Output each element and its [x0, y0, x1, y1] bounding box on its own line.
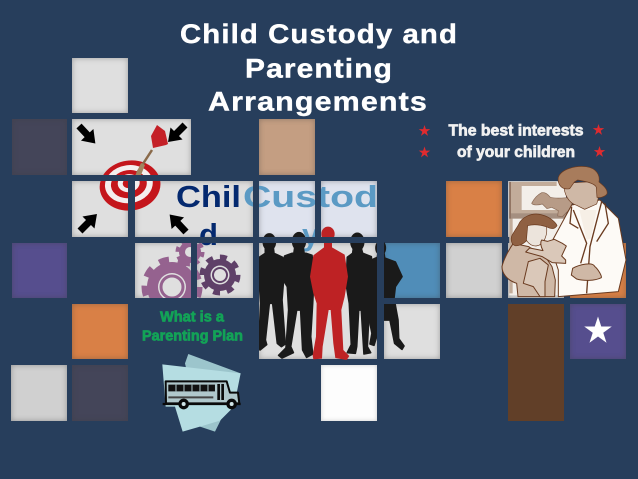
label: What is a Parenting Plan [142, 310, 243, 344]
broken heading: Child Custody: y [302, 217, 320, 252]
silhouette: person 5 [368, 241, 404, 349]
icon: gears [142, 243, 240, 298]
silhouette: red person [310, 227, 349, 360]
paper sheets [162, 354, 241, 432]
shelf background [509, 182, 567, 295]
icon: red stars [419, 124, 605, 157]
icon: bullseye [96, 156, 164, 214]
icon: dark gear [202, 257, 238, 293]
title [180, 19, 458, 116]
text: best interests [448, 122, 584, 161]
label: What is a Parenting Plan: Parenting Plan [142, 328, 243, 344]
broken heading: Child Custody: d [199, 217, 218, 252]
icon: school bus on paper [162, 354, 241, 432]
icon: target with dart [96, 125, 168, 214]
silhouettes of people [259, 227, 404, 360]
white coat woman [550, 166, 626, 297]
broken heading: Child Custody: Chil [176, 179, 241, 214]
title: Child Custody and [180, 19, 458, 49]
title: Parenting [245, 54, 393, 84]
dog [532, 193, 574, 217]
title: Arrangements [208, 86, 428, 116]
cat [523, 239, 566, 297]
white star on purple tile [584, 316, 612, 343]
text: best interests: of your children [457, 144, 575, 161]
callout: best interests [419, 122, 605, 161]
silhouette: person 1 [259, 234, 285, 350]
broken heading: Child Custody [176, 179, 378, 252]
label: What is a Parenting Plan: What is a [160, 310, 225, 326]
icon: four arrows [73, 119, 192, 238]
icon: small purple gear [178, 240, 202, 264]
bus [163, 381, 241, 409]
broken heading: Child Custody: Custod [243, 179, 378, 214]
nurse and child with cat [502, 166, 626, 297]
icon: large purple gear [142, 256, 202, 298]
text: best interests: The best interests [448, 122, 584, 140]
silhouette: person 2 [279, 233, 314, 358]
icon: dart [135, 125, 168, 176]
silhouette: person 4 [346, 233, 373, 354]
child [502, 214, 557, 297]
grid gaps overlaying images and text [72, 175, 440, 360]
